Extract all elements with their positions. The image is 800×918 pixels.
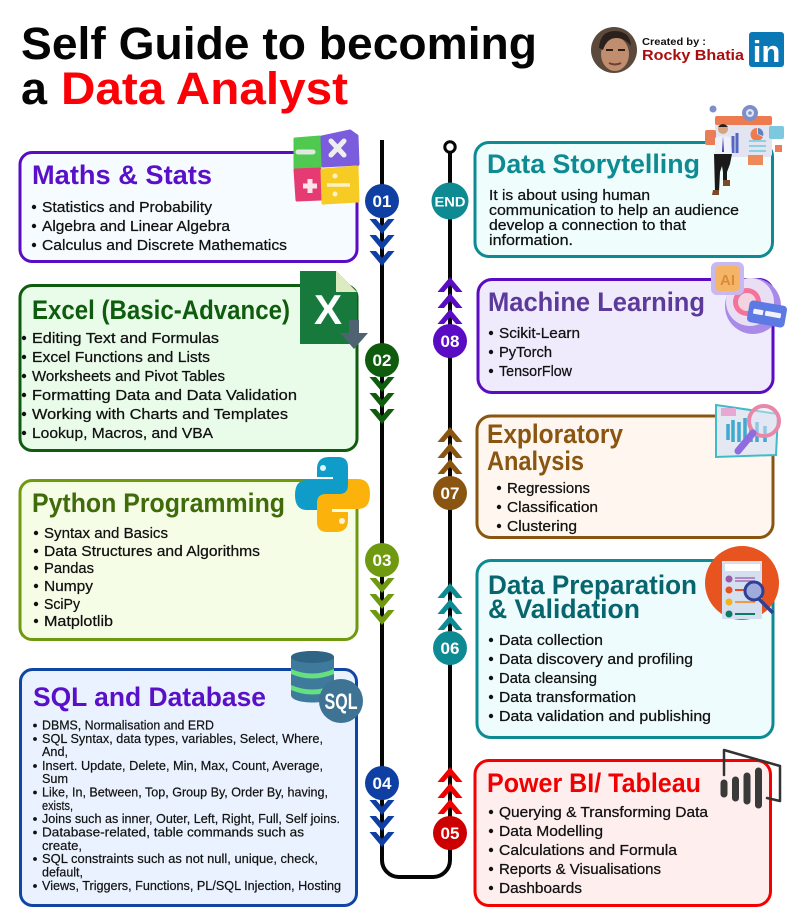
title: a bbox=[21, 63, 48, 114]
panel: excel bbox=[20, 286, 357, 450]
list: python topics: Pandas bbox=[44, 561, 94, 577]
icon: machine learning ai chip: AI bbox=[720, 272, 735, 289]
list: sql topics: Database-related, table commands such as bbox=[42, 824, 305, 840]
heading: exploratory analysis bbox=[487, 419, 623, 476]
end marker: END bbox=[434, 194, 466, 210]
list: excel topics: Worksheets and Pivot Tables bbox=[32, 369, 225, 385]
title: Data Analyst bbox=[61, 63, 348, 114]
list: eda topics bbox=[497, 481, 598, 535]
step 02 marker bbox=[365, 343, 399, 424]
list: power bi topics: Data Modelling bbox=[499, 824, 603, 840]
list: power bi topics bbox=[489, 805, 709, 897]
panel: power bi tableau bbox=[475, 760, 770, 906]
text: storytelling description: It is about using human bbox=[489, 188, 650, 204]
list: power bi topics: Reports & Visualisations bbox=[499, 862, 661, 878]
icon: storytelling presenter bbox=[705, 105, 784, 195]
list: power bi topics: Calculations and Formula bbox=[499, 843, 678, 859]
icon: machine learning ai chip bbox=[711, 262, 788, 334]
heading: data storytelling: Data Storytelling bbox=[487, 149, 700, 179]
list: ml topics: TensorFlow bbox=[499, 364, 573, 380]
step 05 marker: 05 bbox=[441, 824, 459, 843]
text: storytelling description bbox=[489, 188, 739, 249]
list: maths topics bbox=[32, 200, 287, 254]
step 01 marker: 01 bbox=[373, 192, 391, 211]
text: storytelling description: information. bbox=[489, 233, 573, 249]
heading: sql: SQL and Database bbox=[33, 682, 266, 712]
list: sql topics: SQL Syntax, data types, variables, Select, Where, bbox=[42, 731, 323, 746]
list: eda topics: Clustering bbox=[507, 519, 577, 535]
list: python topics: Numpy bbox=[44, 579, 94, 595]
list: maths topics: Calculus and Discrete Mathematics bbox=[42, 238, 287, 254]
title: Self Guide to becoming bbox=[21, 18, 537, 69]
author text: Created by : bbox=[642, 36, 706, 48]
icon: linkedin: in bbox=[753, 34, 780, 69]
list: python topics bbox=[34, 526, 260, 630]
list: excel topics: Excel Functions and Lists bbox=[32, 350, 210, 366]
list: excel topics: Editing Text and Formulas bbox=[32, 331, 219, 347]
list: preparation topics: Data transformation bbox=[499, 690, 636, 706]
list: power bi topics: Querying & Transforming Data bbox=[499, 805, 709, 821]
list: preparation topics: Data collection bbox=[499, 633, 603, 649]
heading: power bi: Power BI/ Tableau bbox=[487, 768, 701, 798]
heading: python: Python Programming bbox=[32, 488, 285, 518]
step 02 marker: 02 bbox=[373, 351, 391, 370]
author text bbox=[642, 36, 745, 64]
panel: python bbox=[20, 480, 357, 640]
list: excel topics: Formatting Data and Data Validation bbox=[32, 388, 297, 404]
icon: database sql bbox=[291, 651, 363, 723]
list: sql topics: Like, In, Between, Top, Group By, Order By, having, bbox=[42, 784, 328, 800]
step 08 marker: 08 bbox=[441, 332, 459, 351]
list: ml topics: Scikit-Learn bbox=[499, 326, 580, 342]
heading: machine learning: Machine Learning bbox=[488, 287, 705, 317]
heading: data preparation bbox=[488, 570, 697, 624]
heading: exploratory analysis: Exploratory bbox=[487, 419, 623, 449]
list: python topics: Syntax and Basics bbox=[44, 526, 168, 542]
icon: database sql: SQL bbox=[324, 689, 358, 714]
list: sql topics: exists, bbox=[42, 798, 73, 813]
step 05 marker bbox=[433, 767, 467, 850]
step 08 marker bbox=[433, 277, 467, 358]
list: maths topics: Algebra and Linear Algebra bbox=[42, 219, 231, 235]
panel: data storytelling bbox=[475, 142, 772, 256]
list: maths topics: Statistics and Probability bbox=[42, 200, 213, 216]
list: python topics: Data Structures and Algorithms bbox=[44, 544, 260, 560]
heading: excel: Excel (Basic-Advance) bbox=[32, 295, 290, 325]
list: excel topics: Lookup, Macros, and VBA bbox=[32, 426, 213, 442]
list: sql topics: Views, Triggers, Functions, PL/SQL Injection, Hosting bbox=[42, 878, 341, 893]
heading: maths and stats: Maths & Stats bbox=[32, 160, 212, 190]
heading: exploratory analysis: Analysis bbox=[487, 446, 584, 476]
icon: power bi bbox=[724, 750, 780, 805]
panel: exploratory analysis bbox=[477, 416, 773, 538]
step 07 marker bbox=[433, 427, 467, 510]
text: storytelling description: develop a connection to that bbox=[489, 218, 686, 234]
step 01 marker bbox=[365, 184, 399, 266]
list: eda topics: Classification bbox=[507, 500, 598, 516]
list: preparation topics bbox=[489, 633, 711, 725]
marker: end ring bbox=[445, 142, 455, 152]
list: sql topics: Joins such as inner, Outer, Left, Right, Full, Self joins. bbox=[42, 811, 340, 826]
panel: machine learning bbox=[478, 280, 773, 392]
list: preparation topics: Data cleansing bbox=[499, 671, 597, 687]
author text: Rocky Bhatia bbox=[642, 47, 745, 64]
list: ml topics bbox=[489, 326, 580, 380]
list: ml topics: PyTorch bbox=[499, 345, 552, 361]
text: storytelling description: communication to help an audience bbox=[489, 203, 739, 219]
end marker bbox=[432, 182, 468, 220]
step 03 marker: 03 bbox=[373, 551, 391, 570]
icon: excel file bbox=[300, 271, 368, 349]
heading: data preparation: & Validation bbox=[488, 594, 640, 624]
list: preparation topics: Data discovery and profiling bbox=[499, 652, 693, 668]
heading: data preparation: Data Preparation bbox=[488, 570, 697, 600]
list: excel topics: Working with Charts and Templates bbox=[32, 407, 288, 423]
author credit bbox=[591, 27, 784, 73]
list: python topics: Matplotlib bbox=[44, 614, 113, 630]
step 04 marker: 04 bbox=[373, 774, 392, 793]
step 03 marker bbox=[365, 543, 399, 625]
list: eda topics: Regressions bbox=[507, 481, 590, 497]
list: python topics: SciPy bbox=[44, 597, 81, 613]
icon: exploratory magnifier chart bbox=[716, 405, 779, 457]
step 07 marker: 07 bbox=[441, 484, 459, 503]
panel: data preparation bbox=[477, 560, 773, 738]
panel: maths and stats bbox=[20, 152, 357, 262]
list: preparation topics: Data validation and publishing bbox=[499, 709, 711, 725]
list: power bi topics: Dashboards bbox=[499, 881, 582, 897]
icon: data preparation checklist bbox=[705, 546, 779, 620]
icon: excel file: X bbox=[314, 286, 342, 333]
step 06 marker bbox=[433, 583, 467, 665]
step 04 marker bbox=[365, 766, 399, 847]
title bbox=[21, 18, 537, 114]
panel: sql and database bbox=[20, 670, 356, 906]
icon: python logo bbox=[295, 457, 370, 532]
list: excel topics bbox=[22, 331, 297, 442]
list: sql topics: Insert. Update, Delete, Min, Max, Count, Average, bbox=[42, 758, 323, 773]
list: sql topics: SQL constraints such as not null, unique, check, bbox=[42, 851, 318, 866]
list: sql topics: And, bbox=[42, 744, 68, 759]
list: sql topics: DBMS, Normalisation and ERD bbox=[42, 718, 214, 732]
list: sql topics bbox=[33, 718, 341, 893]
list: sql topics: create, bbox=[42, 838, 82, 853]
step 06 marker: 06 bbox=[441, 639, 459, 658]
icon: author portrait bbox=[591, 27, 637, 73]
timeline spine bbox=[382, 140, 450, 877]
list: sql topics: Sum bbox=[42, 771, 68, 786]
list: sql topics: default, bbox=[42, 864, 83, 880]
icon: maths blocks bbox=[295, 131, 358, 203]
